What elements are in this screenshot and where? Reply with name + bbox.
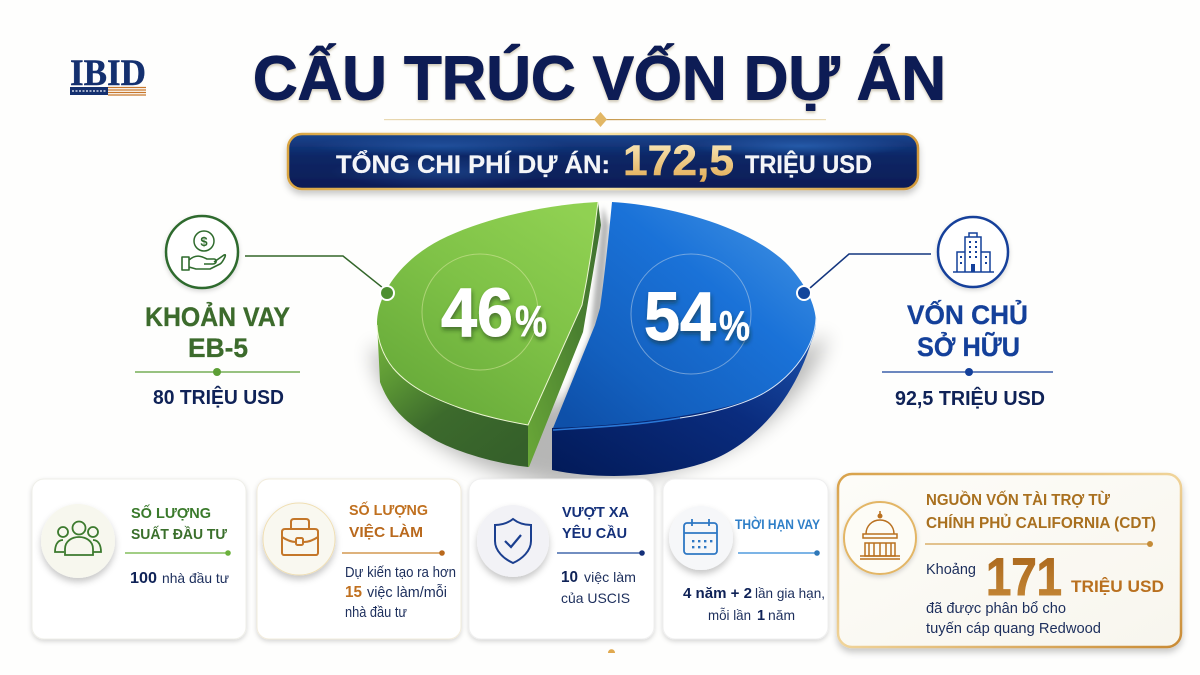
label: equity: SỞ HỮU (917, 330, 1020, 362)
slice: green 46%: 46 (441, 274, 513, 351)
card: number of investors (32, 479, 246, 639)
banner: total project cost: TRIỆU USD (745, 149, 872, 179)
heading (131, 504, 228, 543)
card: California CDT funding (838, 474, 1181, 647)
logo: IBID: IBID (70, 53, 146, 94)
heading: SỐ LƯỢNG (349, 501, 428, 519)
card: number of jobs (257, 479, 461, 639)
icon: office building (938, 217, 1008, 287)
body text: Khoảng (926, 561, 976, 578)
heading (562, 504, 629, 542)
body text: nhà đầu tư (345, 605, 407, 621)
icon: hand with dollar coin (166, 216, 238, 288)
callout line: green (245, 256, 394, 300)
icon: hand with dollar coin: $ (200, 234, 208, 249)
body text: 4 năm + 2 (683, 586, 752, 602)
card: loan term (663, 479, 828, 639)
body text: 1 (757, 608, 765, 624)
body text: Dự kiến tạo ra hơn (345, 565, 456, 581)
body text (683, 585, 825, 624)
body text: 10 (561, 569, 578, 586)
card: exceeds requirement (469, 479, 654, 639)
body text (130, 570, 229, 587)
label: EB-5 loan: 80 TRIỆU USD (153, 385, 284, 409)
body text: lần gia hạn, (755, 585, 825, 601)
icon: briefcase (263, 503, 335, 575)
banner: total project cost (288, 134, 918, 189)
heading (926, 491, 1156, 532)
heading: SUẤT ĐẦU TƯ (131, 526, 228, 543)
label: equity: 92,5 TRIỆU USD (895, 386, 1045, 410)
body text: 15 (345, 584, 362, 601)
icon: calendar (669, 506, 733, 570)
icon: people (41, 504, 115, 578)
slice: green 46%: % (515, 297, 547, 346)
label: equity (882, 298, 1053, 410)
icon: shield check (477, 505, 549, 577)
heading: NGUỒN VỐN TÀI TRỢ TỪ (926, 491, 1110, 509)
label: EB-5 loan: KHOẢN VAY (145, 300, 290, 332)
label: equity: VỐN CHỦ (907, 298, 1028, 330)
heading (349, 501, 428, 541)
body text: TRIỆU USD (1071, 577, 1164, 596)
body text: nhà đầu tư (162, 570, 229, 586)
small gold mark (608, 649, 615, 653)
heading: VƯỢT XA (562, 504, 629, 521)
slice: blue 54% (552, 202, 816, 476)
pie shadow (372, 335, 828, 487)
body text: việc làm (584, 569, 636, 585)
icon: capitol (844, 502, 916, 574)
body text: đã được phân bổ cho (926, 600, 1066, 617)
slice: blue 54%: 54 (644, 278, 716, 355)
body text (926, 548, 1164, 637)
body text: tuyến cáp quang Redwood (926, 620, 1101, 637)
heading: CHÍNH PHỦ CALIFORNIA (CDT) (926, 514, 1156, 532)
label: EB-5 loan (135, 300, 300, 409)
slice: green 46% (377, 202, 601, 467)
body text: 100 (130, 570, 157, 587)
body text: mỗi lần (708, 607, 751, 623)
body text: của USCIS (561, 590, 630, 606)
body text: 171 (986, 548, 1062, 607)
banner: total project cost: 172,5 (623, 137, 734, 185)
slice: blue 54%: % (719, 302, 750, 349)
banner: total project cost: TỔNG CHI PHÍ DỰ ÁN: (336, 149, 610, 179)
body text (345, 565, 456, 621)
body text: việc làm/mỗi (367, 584, 447, 601)
title divider (384, 112, 826, 127)
heading: YÊU CẦU (562, 524, 627, 542)
body text (561, 569, 636, 606)
callout line: blue (797, 254, 931, 300)
heading: THỜI HẠN VAY (735, 515, 821, 532)
heading: SỐ LƯỢNG (131, 504, 211, 522)
body text: năm (768, 607, 795, 623)
heading: VIỆC LÀM (349, 523, 423, 541)
label: EB-5 loan: EB-5 (188, 333, 248, 363)
pie chart (377, 202, 816, 476)
title: CẤU TRÚC VỐN DỰ ÁN (253, 44, 946, 114)
